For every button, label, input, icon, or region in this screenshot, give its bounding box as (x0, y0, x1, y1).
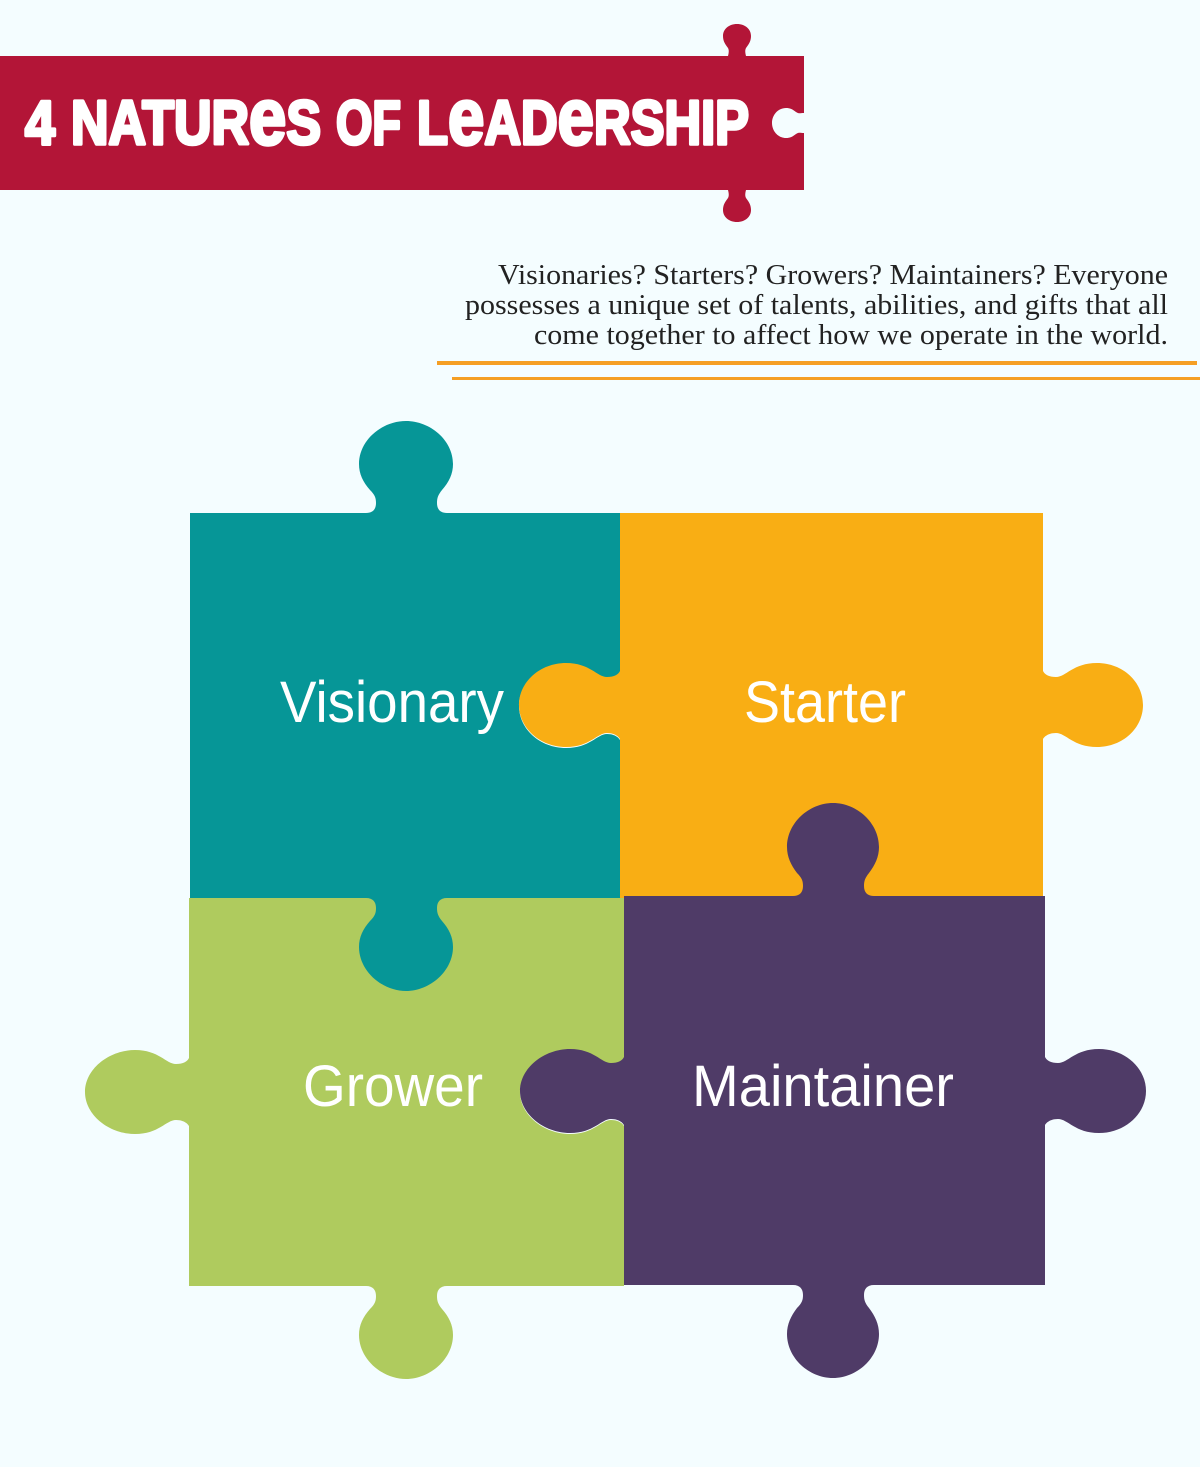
label: Starter: Starter (744, 670, 906, 735)
puzzle piece: Grower (85, 898, 624, 1379)
title: OF (336, 89, 401, 158)
title: LeADeRSHIP (417, 72, 749, 161)
title: NATUReS (71, 72, 321, 161)
intro text: Visionaries? Starters? Growers? Maintainers? Everyone (498, 260, 1168, 291)
label: Visionary: Visionary (280, 670, 504, 735)
label: Maintainer: Maintainer (692, 1054, 954, 1119)
intro text (465, 260, 1168, 351)
intro text: come together to affect how we operate in the world. (534, 320, 1168, 351)
puzzle piece: Starter (519, 513, 1143, 898)
label: Grower: Grower (303, 1054, 483, 1119)
title (25, 72, 749, 161)
puzzle piece: Maintainer (520, 803, 1146, 1378)
title: 4 (25, 89, 55, 158)
title banner (0, 24, 804, 222)
puzzle piece: Visionary (190, 421, 620, 991)
intro text: possesses a unique set of talents, abilities, and gifts that all (465, 290, 1168, 321)
